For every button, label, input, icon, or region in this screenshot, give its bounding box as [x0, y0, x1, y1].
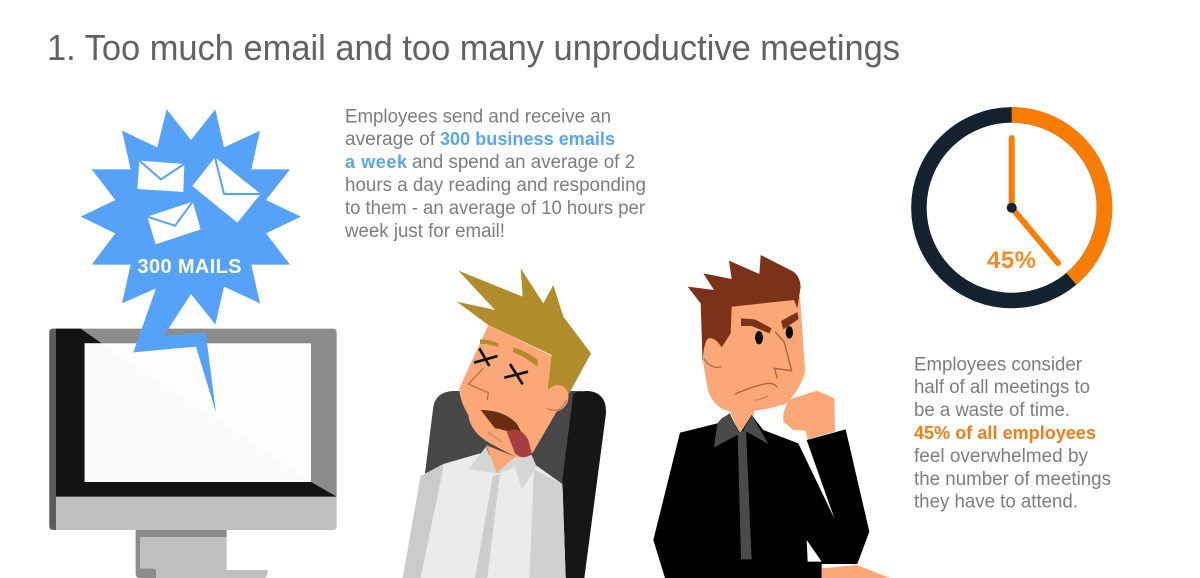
text block: email statistics: Employees send and receive an	[345, 106, 611, 128]
illustration: frustrated employee	[653, 255, 890, 578]
text block: email statistics: average of	[345, 129, 436, 150]
clock hands	[1012, 138, 1058, 263]
title: 1. Too much email and too many unproductive meetings	[47, 27, 900, 68]
text block: email statistics: a week	[345, 152, 408, 172]
illustration: computer monitor	[49, 329, 337, 578]
text block: email statistics: to them - an average of 10 hours per	[345, 198, 646, 219]
text block: meeting statistics: Employees consider	[914, 354, 1083, 376]
icon: envelope 1	[137, 161, 184, 192]
text block: email statistics: week just for email!	[344, 221, 505, 242]
label: 45%: 45%	[987, 247, 1036, 274]
chart: clock donut 45%	[919, 115, 1105, 300]
text block: email statistics	[344, 106, 646, 242]
text block: meeting statistics: half of all meetings to	[914, 377, 1090, 398]
text block: email statistics: hours a day reading and responding	[345, 175, 646, 196]
text block: meeting statistics: feel overwhelmed by	[914, 446, 1088, 467]
text block: meeting statistics: be a waste of time.	[914, 400, 1070, 421]
text block: meeting statistics: the number of meetings	[914, 469, 1111, 490]
text block: email statistics: and spend an average of 2	[412, 152, 635, 173]
speech burst: 300 mails	[81, 109, 301, 413]
icon: envelope 2	[192, 157, 261, 223]
illustration: exhausted employee	[403, 268, 606, 578]
icon: envelope 3	[147, 202, 201, 244]
text block: meeting statistics: 45% of all employees	[914, 423, 1096, 443]
text block: meeting statistics	[914, 354, 1111, 512]
text block: email statistics: 300 business emails	[440, 129, 615, 149]
text block: meeting statistics: they have to attend.	[914, 492, 1078, 512]
label: 300 mails: 300 MAILS	[138, 256, 242, 278]
